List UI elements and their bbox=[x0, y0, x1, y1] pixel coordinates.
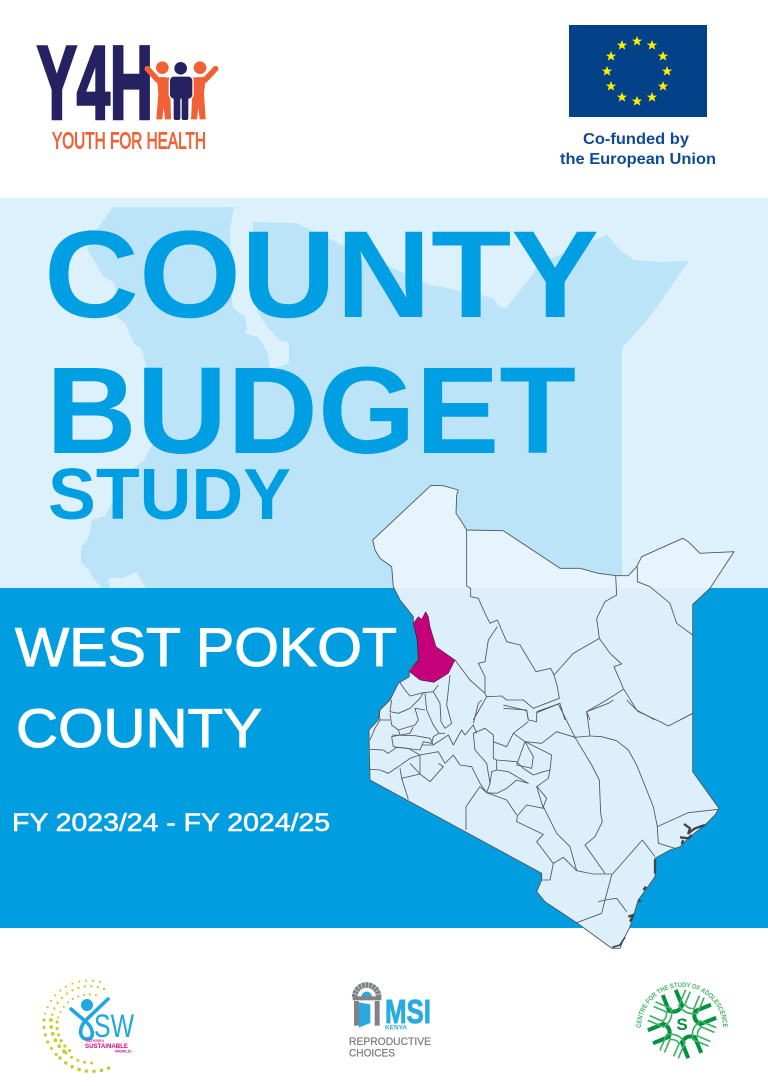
tagline bbox=[85, 1039, 131, 1054]
funding text bbox=[560, 131, 716, 168]
logo: MSI Kenya Reproductive Choices bbox=[349, 985, 431, 1060]
dotted arc bbox=[44, 981, 115, 1071]
logo: YSW Youth for a Sustainable World: SW bbox=[94, 1008, 135, 1044]
funding text: Co-funded by bbox=[583, 131, 689, 148]
heading: West Pokot County: WEST POKOT bbox=[15, 616, 397, 678]
panel: light blue title background bbox=[0, 198, 768, 588]
figure and letters bbox=[71, 999, 108, 1039]
title: County Budget Study: COUNTY bbox=[44, 206, 599, 344]
county borders south bbox=[370, 675, 718, 923]
logo: European Union flag bbox=[560, 25, 716, 168]
title: County Budget Study: BUDGET bbox=[46, 343, 576, 480]
mangrove coast details bbox=[612, 824, 705, 947]
Y4H wordmark: Y4H bbox=[37, 26, 153, 142]
panel: blue county band bbox=[0, 588, 768, 928]
text: financial years: FY 2023/24 - FY 2024/25 bbox=[12, 809, 330, 837]
tagline: YOUTH FOR HEALTH bbox=[52, 128, 206, 154]
map outline bbox=[369, 485, 734, 948]
heading: West Pokot County: COUNTY bbox=[16, 697, 262, 759]
funding text: the European Union bbox=[560, 151, 716, 168]
background map silhouette bbox=[81, 207, 689, 588]
logo: YSW Youth for a Sustainable World bbox=[44, 981, 135, 1071]
title: County Budget Study bbox=[44, 206, 599, 535]
logo: Y4H Youth for Health bbox=[37, 26, 216, 154]
reproductive choices text: REPRODUCTIVE bbox=[349, 1036, 431, 1048]
tagline: YOUTH FOR A bbox=[85, 1039, 104, 1043]
circular name: CENTRE FOR THE STUDY OF ADOLESCENCE bbox=[636, 982, 728, 1028]
heading: West Pokot County bbox=[15, 616, 397, 759]
radial U pattern bbox=[648, 990, 716, 1058]
county borders north bbox=[455, 530, 693, 720]
title: County Budget Study: STUDY bbox=[48, 455, 291, 535]
MSI wordmark: MSI bbox=[385, 993, 431, 1030]
doorway icon bbox=[353, 985, 381, 1028]
reproductive choices text: CHOICES bbox=[349, 1048, 395, 1060]
tagline: WORLD bbox=[115, 1050, 131, 1054]
tagline: SUSTAINABLE bbox=[85, 1044, 128, 1050]
logo: Centre for the Study of Adolescence bbox=[636, 982, 728, 1059]
reproductive choices text bbox=[349, 1036, 431, 1060]
central S: S bbox=[676, 1015, 688, 1034]
Kenya label: KENYA bbox=[385, 1024, 407, 1032]
flag stars bbox=[602, 36, 672, 106]
map of Kenya counties bbox=[369, 485, 734, 948]
icon: three people bbox=[147, 61, 216, 120]
flag rectangle bbox=[569, 25, 707, 117]
West Pokot county highlight bbox=[409, 612, 455, 682]
